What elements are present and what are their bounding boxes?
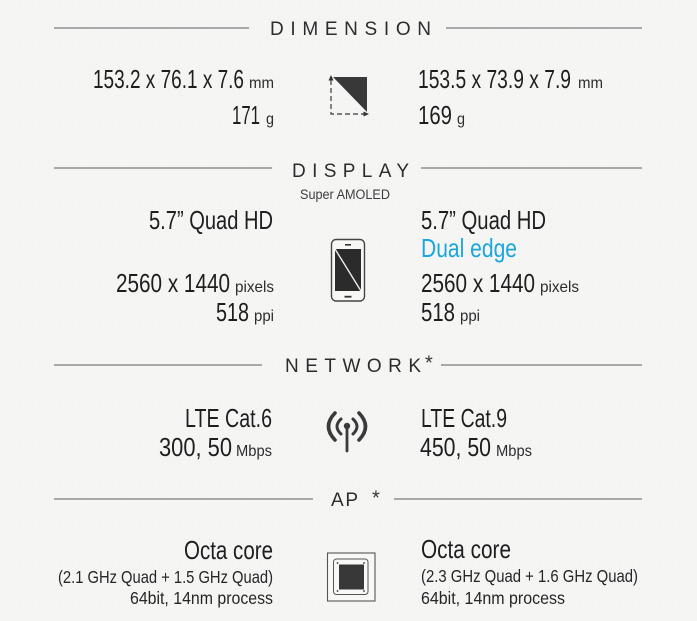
icon: antenna xyxy=(328,413,366,451)
heading asterisk: * xyxy=(372,488,380,510)
right resolution: 2560 x 1440 xyxy=(421,268,535,298)
heading: network: NETWORK xyxy=(285,356,421,377)
panel: network xyxy=(54,352,642,462)
right clock speeds: (2.3 GHz Quad + 1.6 GHz Quad) xyxy=(421,566,638,586)
right weight value: 169 xyxy=(418,100,452,130)
right density: 518 xyxy=(421,297,455,327)
left weight value: 171 xyxy=(232,100,260,130)
panel: ap xyxy=(54,488,642,608)
left speed unit: Mbps xyxy=(236,443,272,460)
panel: display xyxy=(54,161,642,327)
icon: dimension triangle xyxy=(328,75,369,116)
left screen size: 5.7” Quad HD xyxy=(149,205,273,235)
left weight unit: g xyxy=(266,111,274,128)
left resolution: 2560 x 1440 xyxy=(116,268,230,298)
right process: 64bit, 14nm process xyxy=(421,588,565,608)
icon: phone xyxy=(332,240,364,301)
right core type: Octa core xyxy=(421,534,511,564)
left size value: 153.2 x 76.1 x 7.6 xyxy=(93,64,244,94)
left density: 518 xyxy=(216,297,249,327)
left process: 64bit, 14nm process xyxy=(130,588,273,608)
right size value: 153.5 x 73.9 x 7.9 xyxy=(418,64,571,94)
subheading: super amoled: Super AMOLED xyxy=(300,187,390,202)
right screen size: 5.7” Quad HD xyxy=(421,205,546,235)
right density unit: ppi xyxy=(460,308,480,325)
left core type: Octa core xyxy=(184,535,273,565)
right size unit: mm xyxy=(578,75,603,92)
right lte category: LTE Cat.9 xyxy=(421,403,507,433)
right dual edge highlight: Dual edge xyxy=(421,233,517,263)
right speed: 450, 50 xyxy=(420,432,491,462)
heading: display: DISPLAY xyxy=(292,161,409,182)
right speed unit: Mbps xyxy=(496,443,532,460)
heading: ap: AP xyxy=(331,490,358,511)
panel: dimension xyxy=(54,19,642,130)
heading: dimension: DIMENSION xyxy=(270,19,431,40)
left resolution unit: pixels xyxy=(235,279,274,296)
heading asterisk: * xyxy=(425,352,433,374)
right resolution unit: pixels xyxy=(540,279,579,296)
left lte category: LTE Cat.6 xyxy=(185,403,272,433)
left speed: 300, 50 xyxy=(159,432,232,462)
icon: chip xyxy=(328,553,375,601)
right weight unit: g xyxy=(457,111,465,128)
left size unit: mm xyxy=(249,75,274,92)
left density unit: ppi xyxy=(254,308,274,325)
left clock speeds: (2.1 GHz Quad + 1.5 GHz Quad) xyxy=(58,567,273,587)
